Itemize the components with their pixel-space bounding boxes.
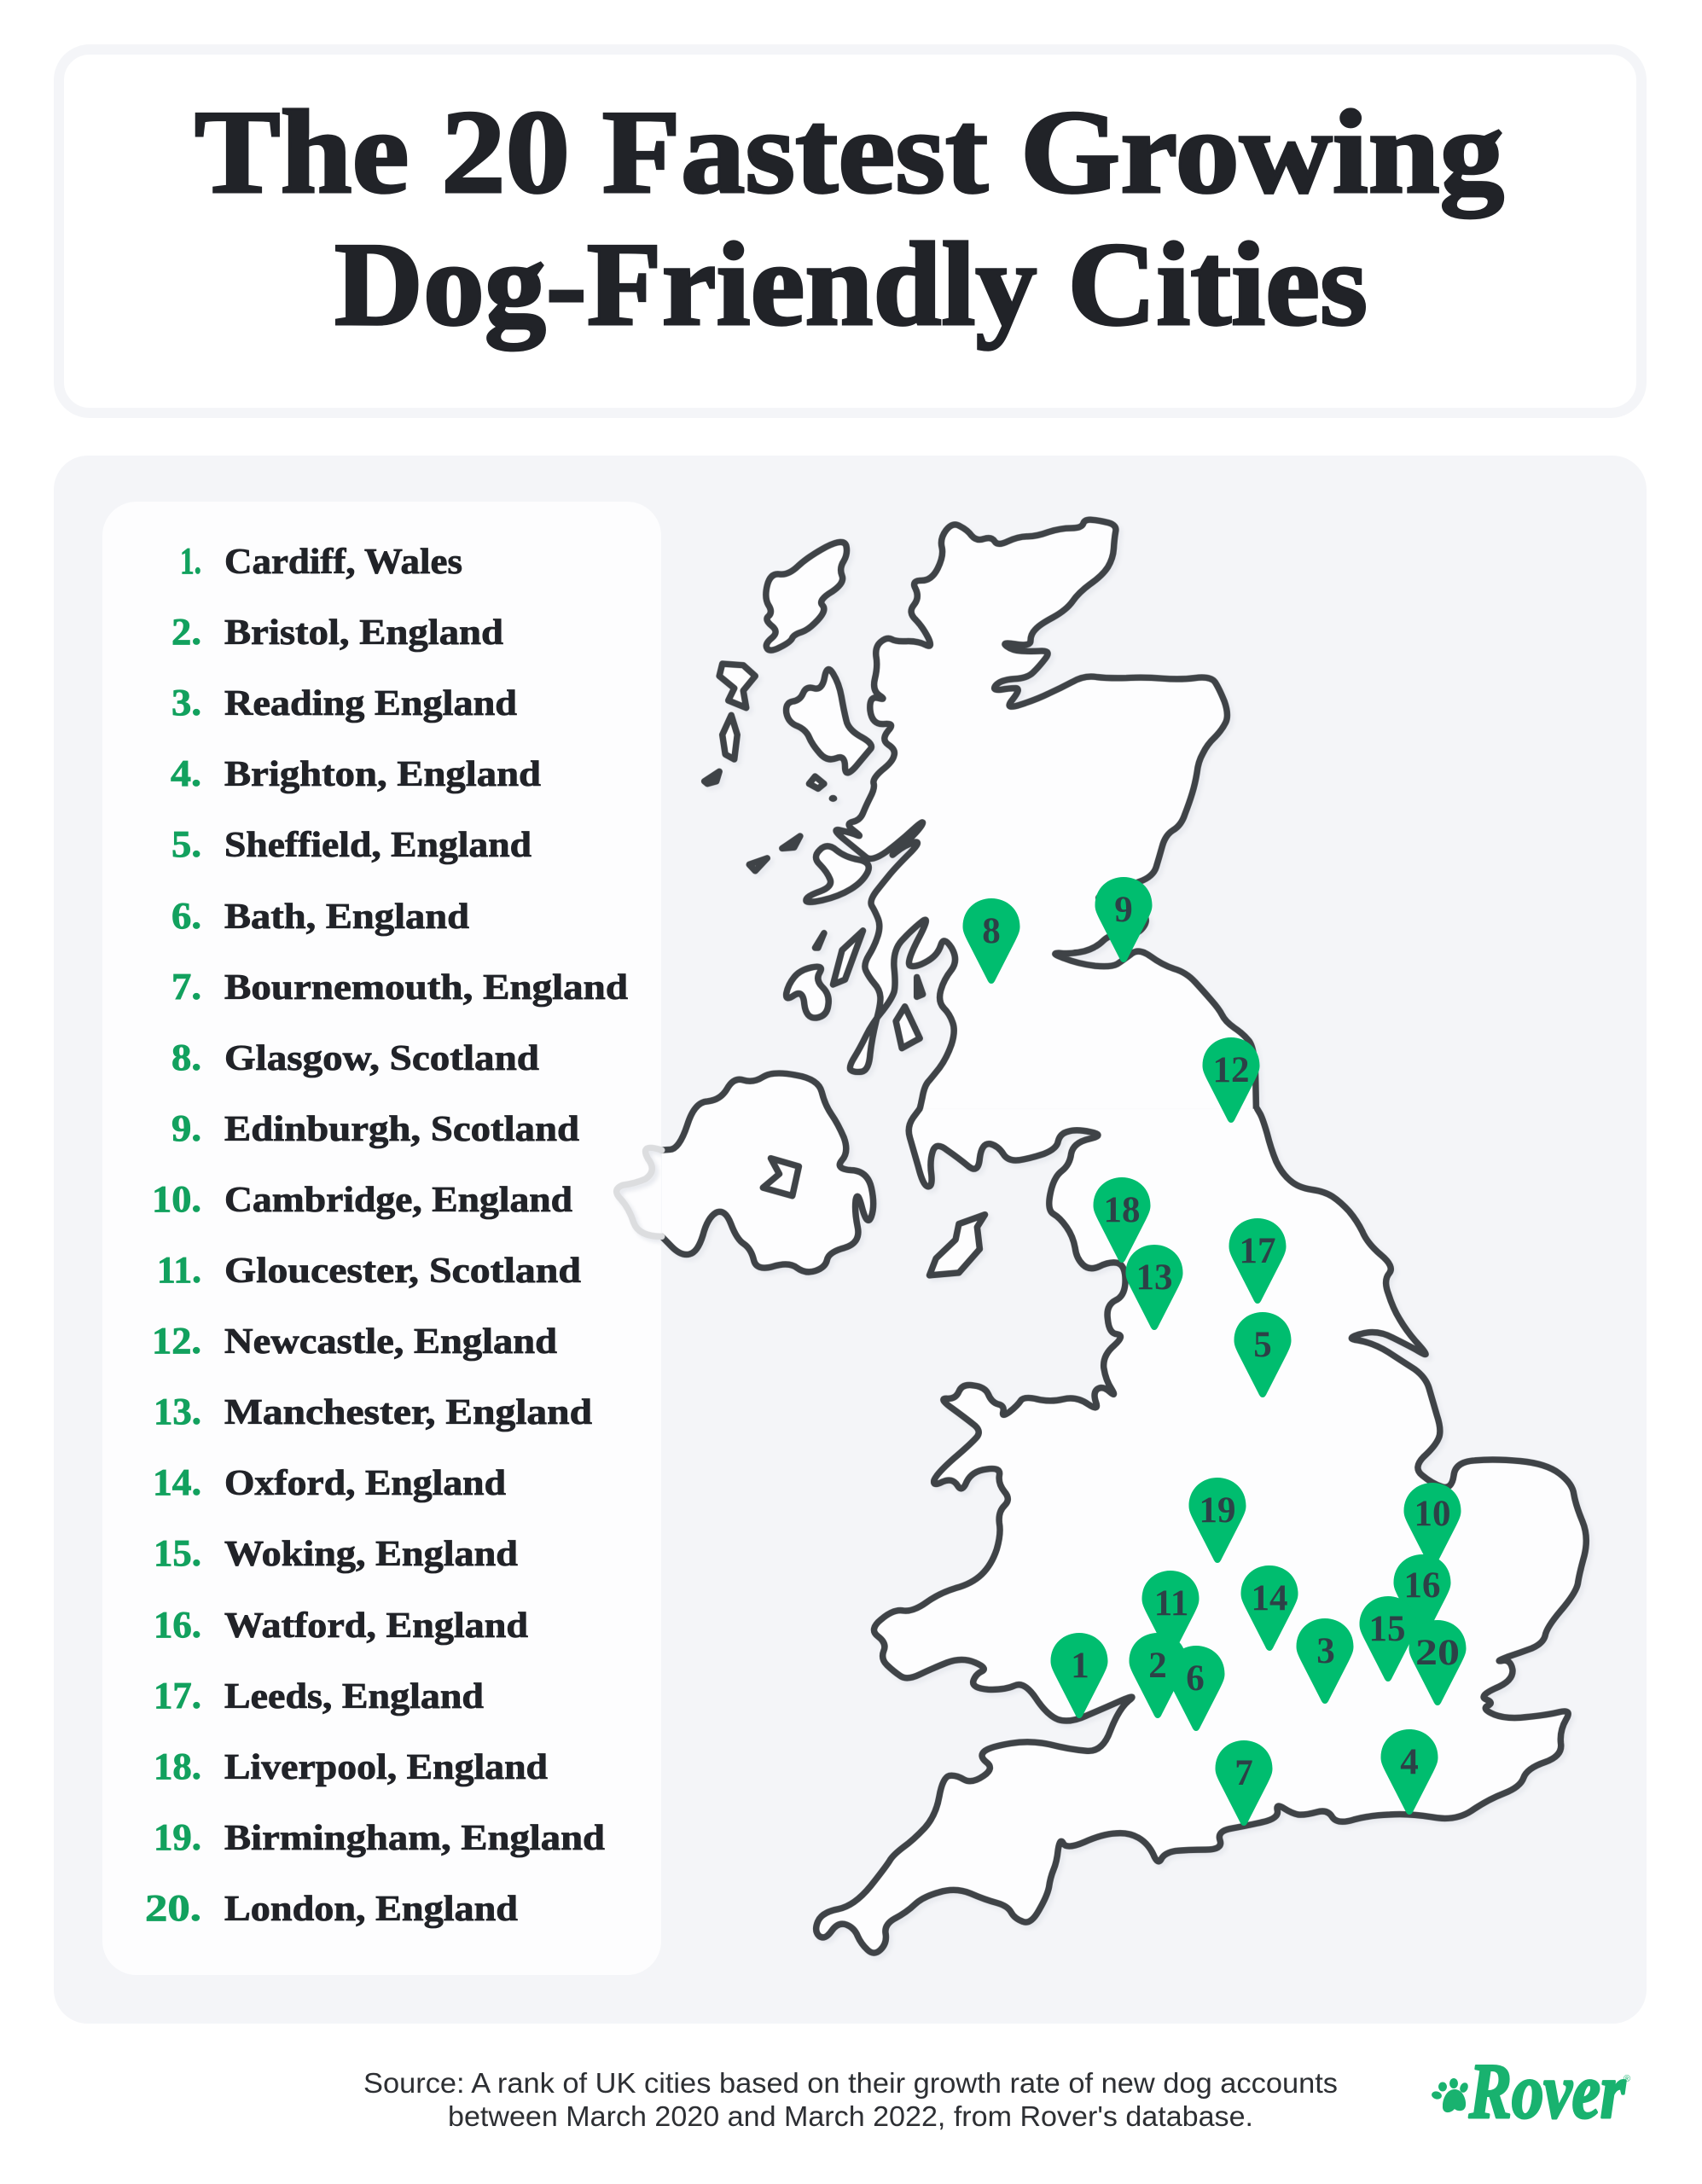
panel: map background bbox=[54, 456, 1647, 2024]
source note bbox=[363, 2067, 1338, 2132]
list item 16 bbox=[154, 1604, 528, 1646]
list item 2: 2. bbox=[171, 611, 201, 653]
pin 10 bbox=[1404, 1483, 1461, 1568]
pin 5: 5 bbox=[1253, 1325, 1272, 1365]
list item 5: Sheffield, England bbox=[224, 826, 532, 865]
pin 14 bbox=[1240, 1565, 1298, 1651]
Isle of Man bbox=[929, 1215, 985, 1275]
pin 13: 13 bbox=[1136, 1258, 1172, 1298]
pin 12 bbox=[1203, 1037, 1259, 1123]
map of the UK bbox=[617, 520, 1586, 1953]
list item 4: 4. bbox=[171, 752, 201, 794]
pin 7 bbox=[1215, 1740, 1273, 1826]
pin 16: 16 bbox=[1404, 1565, 1440, 1606]
list item 4: Brighton, England bbox=[224, 755, 541, 794]
pin 1: 1 bbox=[1071, 1646, 1089, 1686]
Tiree bbox=[749, 858, 767, 871]
list item 12: 12. bbox=[152, 1320, 201, 1362]
pin 4 bbox=[1380, 1729, 1438, 1815]
pin 20 bbox=[1409, 1620, 1466, 1705]
pin 20: 20 bbox=[1415, 1633, 1460, 1673]
list item 20: London, England bbox=[224, 1890, 518, 1929]
pin 12: 12 bbox=[1213, 1050, 1249, 1090]
pin 16 bbox=[1394, 1554, 1450, 1640]
Barra bbox=[705, 771, 719, 784]
North Uist bbox=[719, 664, 755, 708]
pin 15 bbox=[1360, 1596, 1416, 1682]
South Uist bbox=[723, 715, 737, 759]
list item 6: 6. bbox=[171, 895, 201, 937]
list item 19: 19. bbox=[154, 1816, 201, 1858]
list item 8: 8. bbox=[171, 1037, 201, 1078]
pin 7: 7 bbox=[1234, 1753, 1253, 1793]
registered mark: ® bbox=[1624, 2074, 1630, 2084]
list item 7: Bournemouth, England bbox=[224, 968, 628, 1008]
source note: Source: A rank of UK cities based on their growth rate of new dog accounts bbox=[363, 2067, 1338, 2099]
list item 11: Gloucester, Scotland bbox=[224, 1252, 581, 1291]
list item 1: 1. bbox=[180, 540, 201, 582]
list item 12: Newcastle, England bbox=[224, 1322, 557, 1362]
Northern Ireland bbox=[662, 1073, 874, 1272]
list item 15: Woking, England bbox=[224, 1535, 518, 1574]
list item 9: 9. bbox=[171, 1107, 201, 1149]
list item 15 bbox=[154, 1532, 518, 1574]
title panel bbox=[59, 49, 1641, 413]
England and Wales outline, Northern Ireland, Isle of Man bbox=[617, 1073, 1586, 1953]
list item 19: Birmingham, England bbox=[224, 1819, 605, 1858]
list item 14: Oxford, England bbox=[224, 1464, 506, 1503]
pin 17: 17 bbox=[1239, 1231, 1276, 1271]
list item 20: 20. bbox=[145, 1887, 201, 1929]
list item 3: 3. bbox=[171, 682, 201, 723]
source note: between March 2020 and March 2022, from Rover's database. bbox=[448, 2100, 1253, 2132]
title heading: Dog-Friendly Cities bbox=[334, 218, 1368, 351]
Bute bbox=[917, 977, 923, 996]
pin 19: 19 bbox=[1200, 1490, 1235, 1531]
pin 3: 3 bbox=[1316, 1631, 1335, 1671]
pin 13 bbox=[1126, 1245, 1182, 1330]
pin 18: 18 bbox=[1104, 1190, 1140, 1230]
Lough Neagh bbox=[763, 1159, 799, 1196]
Lewis and Harris bbox=[766, 542, 846, 650]
pin 19 bbox=[1189, 1478, 1246, 1563]
Irish border bbox=[617, 1147, 662, 1236]
list item 14 bbox=[153, 1461, 506, 1503]
list item 20 bbox=[145, 1887, 518, 1929]
pin 15: 15 bbox=[1368, 1609, 1406, 1649]
pin 10: 10 bbox=[1414, 1494, 1450, 1534]
pin 5 bbox=[1234, 1312, 1292, 1397]
Scotland and northern England outline bbox=[705, 520, 1256, 1109]
list item 11: 11. bbox=[157, 1249, 201, 1291]
list item 18: 18. bbox=[154, 1745, 201, 1787]
list item 10: Cambridge, England bbox=[224, 1181, 572, 1220]
list item 14: 14. bbox=[153, 1461, 201, 1503]
list item 16: 16. bbox=[154, 1604, 201, 1646]
list item 3: Reading England bbox=[224, 684, 517, 723]
Eigg bbox=[829, 795, 837, 802]
list item 2: Bristol, England bbox=[224, 613, 503, 653]
Jura bbox=[833, 931, 863, 985]
Arran bbox=[896, 1007, 920, 1048]
list item 6: Bath, England bbox=[224, 897, 469, 937]
icon: paw bbox=[1431, 2078, 1470, 2112]
Mull bbox=[806, 846, 868, 902]
pin 2: 2 bbox=[1148, 1646, 1167, 1686]
pin 1 bbox=[1051, 1633, 1107, 1718]
pin 4: 4 bbox=[1400, 1742, 1419, 1782]
Rover logo bbox=[1431, 2048, 1630, 2135]
list item 11 bbox=[157, 1249, 581, 1291]
list item 17: Leeds, England bbox=[224, 1677, 484, 1716]
pin 14: 14 bbox=[1251, 1578, 1288, 1618]
pin 9 bbox=[1095, 877, 1152, 962]
pin 6 bbox=[1167, 1646, 1225, 1731]
Skye bbox=[787, 670, 871, 773]
pin 8: 8 bbox=[982, 911, 1001, 951]
pin 6: 6 bbox=[1186, 1658, 1205, 1699]
list item 6 bbox=[171, 895, 469, 937]
list item 1: Cardiff, Wales bbox=[224, 543, 462, 582]
list item 13 bbox=[154, 1391, 592, 1432]
pin 8 bbox=[962, 898, 1020, 984]
pin 11: 11 bbox=[1154, 1583, 1188, 1623]
Colonsay bbox=[815, 933, 824, 948]
pin 11 bbox=[1141, 1571, 1200, 1656]
Coll bbox=[782, 836, 800, 848]
title heading bbox=[195, 86, 1504, 351]
list item 9: Edinburgh, Scotland bbox=[224, 1110, 579, 1149]
list item 13: Manchester, England bbox=[224, 1393, 592, 1432]
list item 13: 13. bbox=[154, 1391, 201, 1432]
list item 18: Liverpool, England bbox=[224, 1748, 548, 1787]
wordmark: Rover bbox=[1468, 2048, 1626, 2135]
list item 8: Glasgow, Scotland bbox=[224, 1039, 539, 1078]
Rum bbox=[809, 776, 824, 788]
pin 3 bbox=[1297, 1618, 1353, 1704]
list item 17: 17. bbox=[154, 1675, 201, 1716]
panel: ranked city list bbox=[102, 502, 661, 1975]
pin 9: 9 bbox=[1114, 890, 1133, 930]
list item 16: Watford, England bbox=[224, 1606, 528, 1646]
list item 7: 7. bbox=[171, 966, 201, 1008]
list item 5: 5. bbox=[171, 823, 201, 865]
list item 12 bbox=[152, 1320, 557, 1362]
Islay bbox=[787, 967, 828, 1018]
list item 15: 15. bbox=[154, 1532, 201, 1574]
pin 17 bbox=[1229, 1218, 1287, 1304]
pin 2 bbox=[1130, 1633, 1186, 1718]
pin 18 bbox=[1094, 1177, 1150, 1263]
list item 10: 10. bbox=[152, 1178, 201, 1220]
title heading: The 20 Fastest Growing bbox=[195, 86, 1504, 218]
list item 17 bbox=[154, 1675, 484, 1716]
